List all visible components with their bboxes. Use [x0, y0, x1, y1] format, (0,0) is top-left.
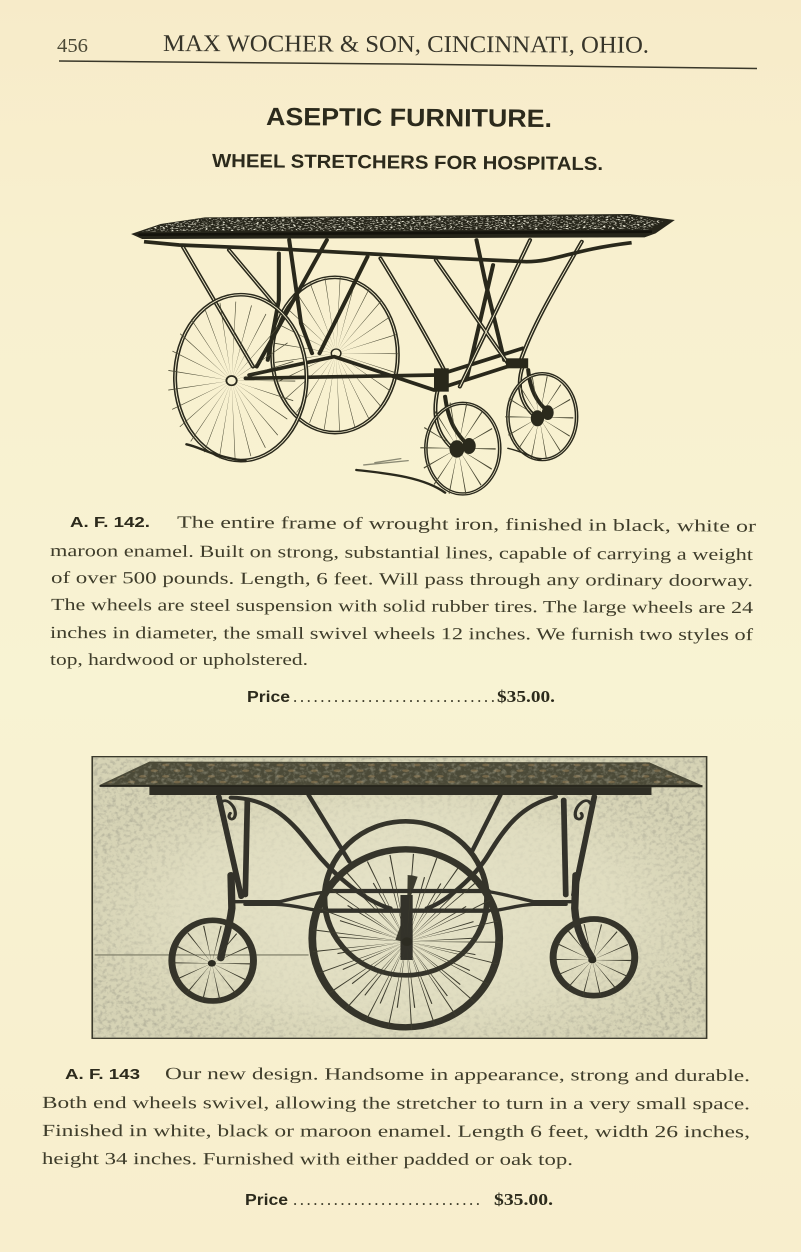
illustration: engraving of stretcher A.F.142 — [131, 214, 675, 494]
right small wheel — [553, 919, 635, 996]
title: ASEPTIC FURNITURE. — [266, 103, 552, 133]
description A.F.143: Finished in white, black or maroon enamel. Length 6 feet, width 26 inches, — [42, 1121, 750, 1141]
front large wheel — [175, 295, 307, 461]
page header — [57, 31, 757, 68]
header rule — [59, 61, 757, 68]
description A.F.143: height 34 inches. Furnished with either padded or oak top. — [42, 1149, 573, 1169]
catalogue number: A. F. 143 — [65, 1066, 140, 1083]
price A.F.142: .............................. — [293, 687, 495, 706]
catalogue number: A. F. 142. — [70, 514, 150, 531]
lower rail of top — [144, 242, 632, 262]
text lines: The entire frame of wrought iron, finished in black, white or — [177, 513, 757, 536]
photo background — [92, 757, 707, 1038]
description A.F.143: Both end wheels swivel, allowing the stretcher to turn in a very small space. — [42, 1093, 750, 1113]
frame and legs — [219, 795, 594, 960]
stretcher top — [131, 214, 675, 239]
subtitle: WHEEL STRETCHERS FOR HOSPITALS. — [212, 151, 603, 175]
description A.F.142: inches in diameter, the small swivel wheels 12 inches. We furnish two styles of — [50, 623, 753, 644]
description A.F.142: maroon enamel. Built on strong, substantial lines, capable of carrying a weight — [50, 541, 753, 564]
ground shadows — [186, 444, 541, 493]
description A.F.142: of over 500 pounds. Length, 6 feet. Will pass through any ordinary doorway. — [51, 568, 753, 590]
rear large wheel — [325, 821, 487, 975]
photograph of stretcher A.F.143 — [92, 757, 707, 1038]
front large wheel — [312, 849, 499, 1027]
description A.F.142: The wheels are steel suspension with solid rubber tires. The large wheels are 24 — [51, 595, 754, 617]
price A.F.143: $35.00. — [494, 1190, 553, 1209]
text lines: Our new design. Handsome in appearance, strong and durable. — [165, 1064, 750, 1085]
small rear swivel wheel — [508, 374, 577, 460]
price A.F.142: $35.00. — [497, 687, 555, 706]
price A.F.142 — [247, 687, 555, 706]
description A.F.142: top, hardwood or upholstered. — [50, 650, 308, 669]
frame and legs — [183, 240, 582, 448]
description A.F.142 — [50, 513, 757, 669]
stretcher top — [100, 762, 703, 795]
left small wheel — [172, 920, 253, 1001]
description A.F.143 — [42, 1064, 750, 1169]
rear large wheel — [272, 277, 398, 433]
price A.F.143: ............................ — [293, 1190, 480, 1209]
price A.F.142: Price — [247, 689, 290, 706]
price A.F.143: Price — [245, 1192, 288, 1209]
page number: 456 — [57, 35, 88, 57]
small front swivel wheel — [426, 403, 500, 494]
running head: MAX WOCHER & SON, CINCINNATI, OHIO. — [163, 31, 649, 59]
price A.F.143 — [245, 1190, 553, 1209]
